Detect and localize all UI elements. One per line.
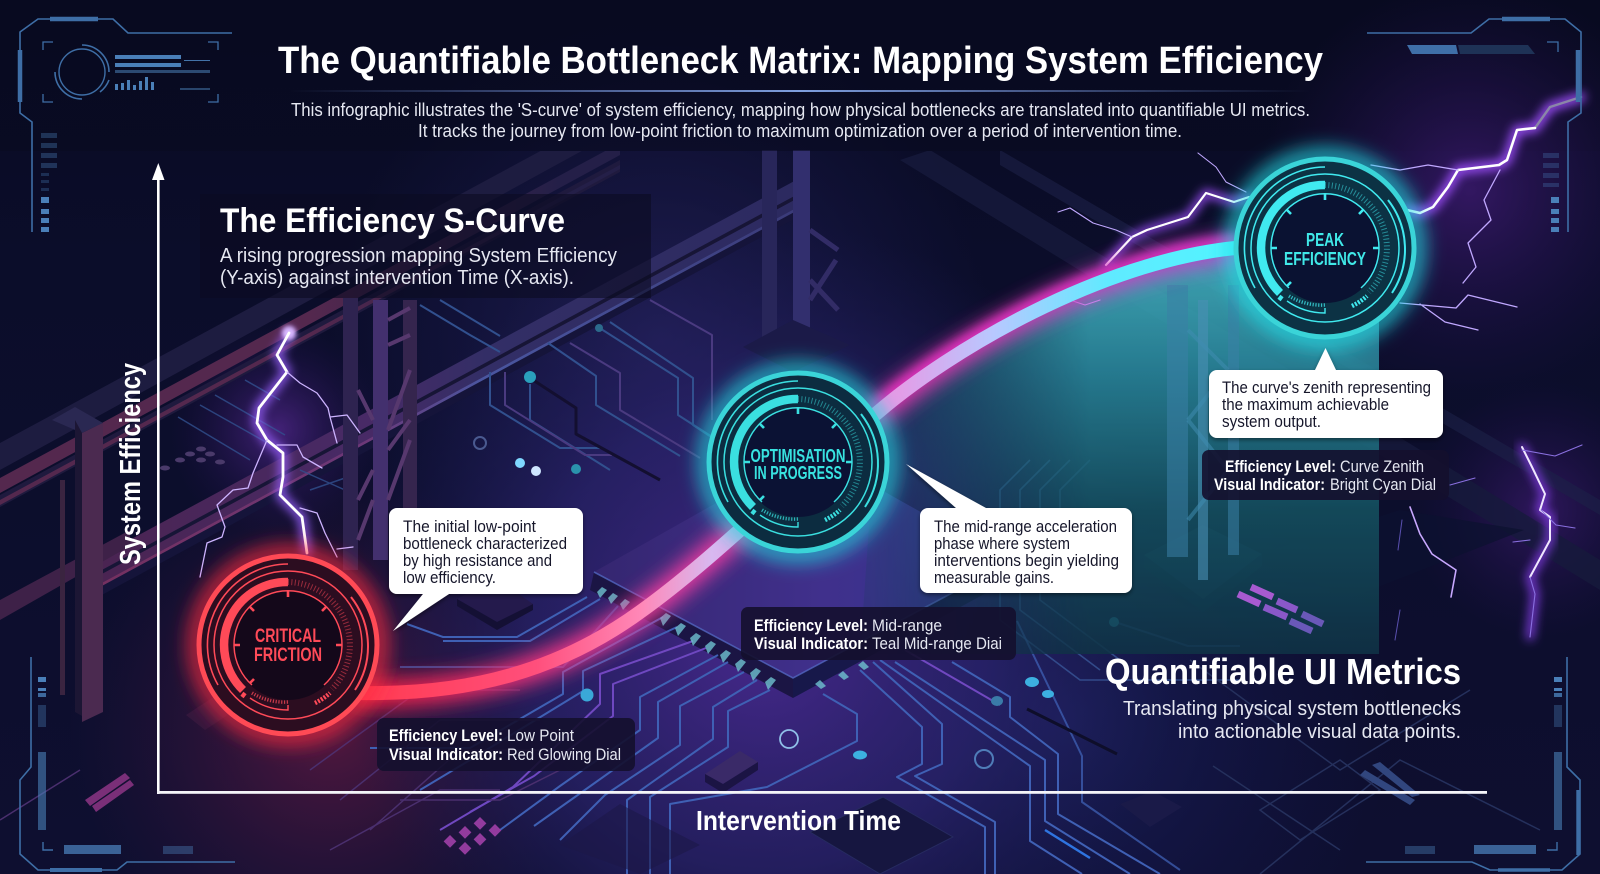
s-curve: glow xyxy=(360,241,1235,693)
dial: optimisation in progress xyxy=(707,371,889,553)
callout: low point: bottleneck characterized xyxy=(403,535,567,553)
info box: mid-range: Efficiency Level: xyxy=(754,617,868,635)
hud: bottom-right corner xyxy=(1366,657,1580,870)
intro text: This infographic illustrates the 'S-curve' of system efficiency, mapping how physical bottlenecks are translated into quantifiable UI metrics. xyxy=(291,99,1310,120)
hud: top-left corner xyxy=(20,19,232,232)
info box: curve zenith: Curve Zenith xyxy=(1340,458,1424,476)
x axis label: Intervention Time xyxy=(696,805,901,836)
info box: low point: Efficiency Level: xyxy=(389,727,503,745)
info box: mid-range: Mid-range xyxy=(872,617,942,635)
dial: optimisation in progress: IN PROGRESS xyxy=(754,463,842,483)
info box: low point xyxy=(377,718,635,771)
lightning: peak right bolt xyxy=(1371,97,1581,330)
info box: low point: Red Glowing Dial xyxy=(507,746,621,764)
info box: curve zenith: Bright Cyan Dial xyxy=(1330,476,1436,494)
info box: mid-range: Visual Indicator: xyxy=(754,635,868,653)
callout: mid-range xyxy=(906,464,1132,593)
background: tall column left xyxy=(52,407,103,722)
panel: efficiency s-curve heading xyxy=(200,194,651,298)
intro text: It tracks the journey from low-point friction to maximum optimization over a period of intervention time. xyxy=(418,120,1182,141)
hud: bottom-left corner xyxy=(20,657,235,870)
panel: efficiency s-curve heading: A rising progression mapping System Efficiency xyxy=(220,244,618,267)
callout: low point: low efficiency. xyxy=(403,569,496,587)
truss tower right xyxy=(1167,285,1239,580)
heading: quantifiable ui metrics: Quantifiable UI Metrics xyxy=(1105,651,1461,692)
panel: efficiency s-curve heading: The Efficiency S-Curve xyxy=(220,202,565,240)
info box: curve zenith xyxy=(1202,450,1449,500)
lightning: lower right bolts xyxy=(1395,445,1582,640)
dial: critical friction: CRITICAL xyxy=(255,626,321,647)
title rule xyxy=(290,90,1310,92)
callout: mid-range: The mid-range acceleration xyxy=(934,518,1117,536)
lightning: left bolt xyxy=(200,326,360,577)
dial: critical friction: FRICTION xyxy=(254,645,322,666)
callout: low point: The initial low-point xyxy=(403,518,536,536)
background: diagonal girders xyxy=(0,108,1600,620)
title: The Quantifiable Bottleneck Matrix: Mapping System Efficiency xyxy=(278,40,1323,82)
background: truss tower top centre xyxy=(743,150,850,372)
dial: peak efficiency: EFFICIENCY xyxy=(1284,249,1366,269)
truss tower right base xyxy=(1144,525,1262,612)
heading: quantifiable ui metrics: into actionable visual data points. xyxy=(1178,720,1461,743)
callout: mid-range: measurable gains. xyxy=(934,569,1054,587)
teal area under the curve xyxy=(860,248,1379,654)
info box: low point: Visual Indicator: xyxy=(389,746,503,764)
callout: zenith: the maximum achievable xyxy=(1222,396,1389,414)
background: circuit traces upper xyxy=(178,300,1240,680)
heading: quantifiable ui metrics xyxy=(1105,651,1461,743)
dial: optimisation in progress: OPTIMISATION xyxy=(750,446,846,466)
dial: peak efficiency: PEAK xyxy=(1306,230,1344,250)
intro text xyxy=(291,99,1310,141)
info box: curve zenith: Visual Indicator: xyxy=(1214,476,1325,494)
dial: critical friction xyxy=(197,554,379,736)
callout: mid-range: phase where system xyxy=(934,535,1070,553)
background: truss tower left xyxy=(343,298,417,570)
y axis label: System Efficiency xyxy=(115,363,147,565)
purple dash markers xyxy=(1238,587,1323,631)
hud: top-right corner xyxy=(1367,19,1581,232)
info box: mid-range: Teal Mid-range Diai xyxy=(872,635,1002,653)
callout: zenith: The curve's zenith representing xyxy=(1222,379,1431,397)
lightning: peak left bolt xyxy=(1058,153,1249,305)
background: pads and nodes xyxy=(85,324,1420,855)
heading: quantifiable ui metrics: Translating physical system bottlenecks xyxy=(1123,697,1461,720)
dial: peak efficiency xyxy=(1234,157,1416,339)
callout: low point: by high resistance and xyxy=(403,552,552,570)
callout: zenith xyxy=(1209,348,1443,438)
x axis xyxy=(157,791,1487,794)
background: purple chip xyxy=(457,450,1010,698)
background: dim traces xyxy=(0,660,1540,874)
info box: mid-range xyxy=(741,607,1016,660)
callout: mid-range: interventions begin yielding xyxy=(934,552,1119,570)
callout: low point xyxy=(389,508,583,631)
info box: low point: Low Point xyxy=(507,727,574,745)
background: circuit traces below chip xyxy=(370,597,1240,874)
y axis with arrow xyxy=(152,163,164,794)
title band xyxy=(0,0,1600,151)
info box: curve zenith: Efficiency Level: xyxy=(1225,458,1336,476)
s-curve line xyxy=(360,248,1235,693)
background: dark chips xyxy=(186,510,1524,874)
callout: zenith: system output. xyxy=(1222,413,1321,431)
panel: efficiency s-curve heading: (Y-axis) against intervention Time (X-axis). xyxy=(220,266,574,289)
